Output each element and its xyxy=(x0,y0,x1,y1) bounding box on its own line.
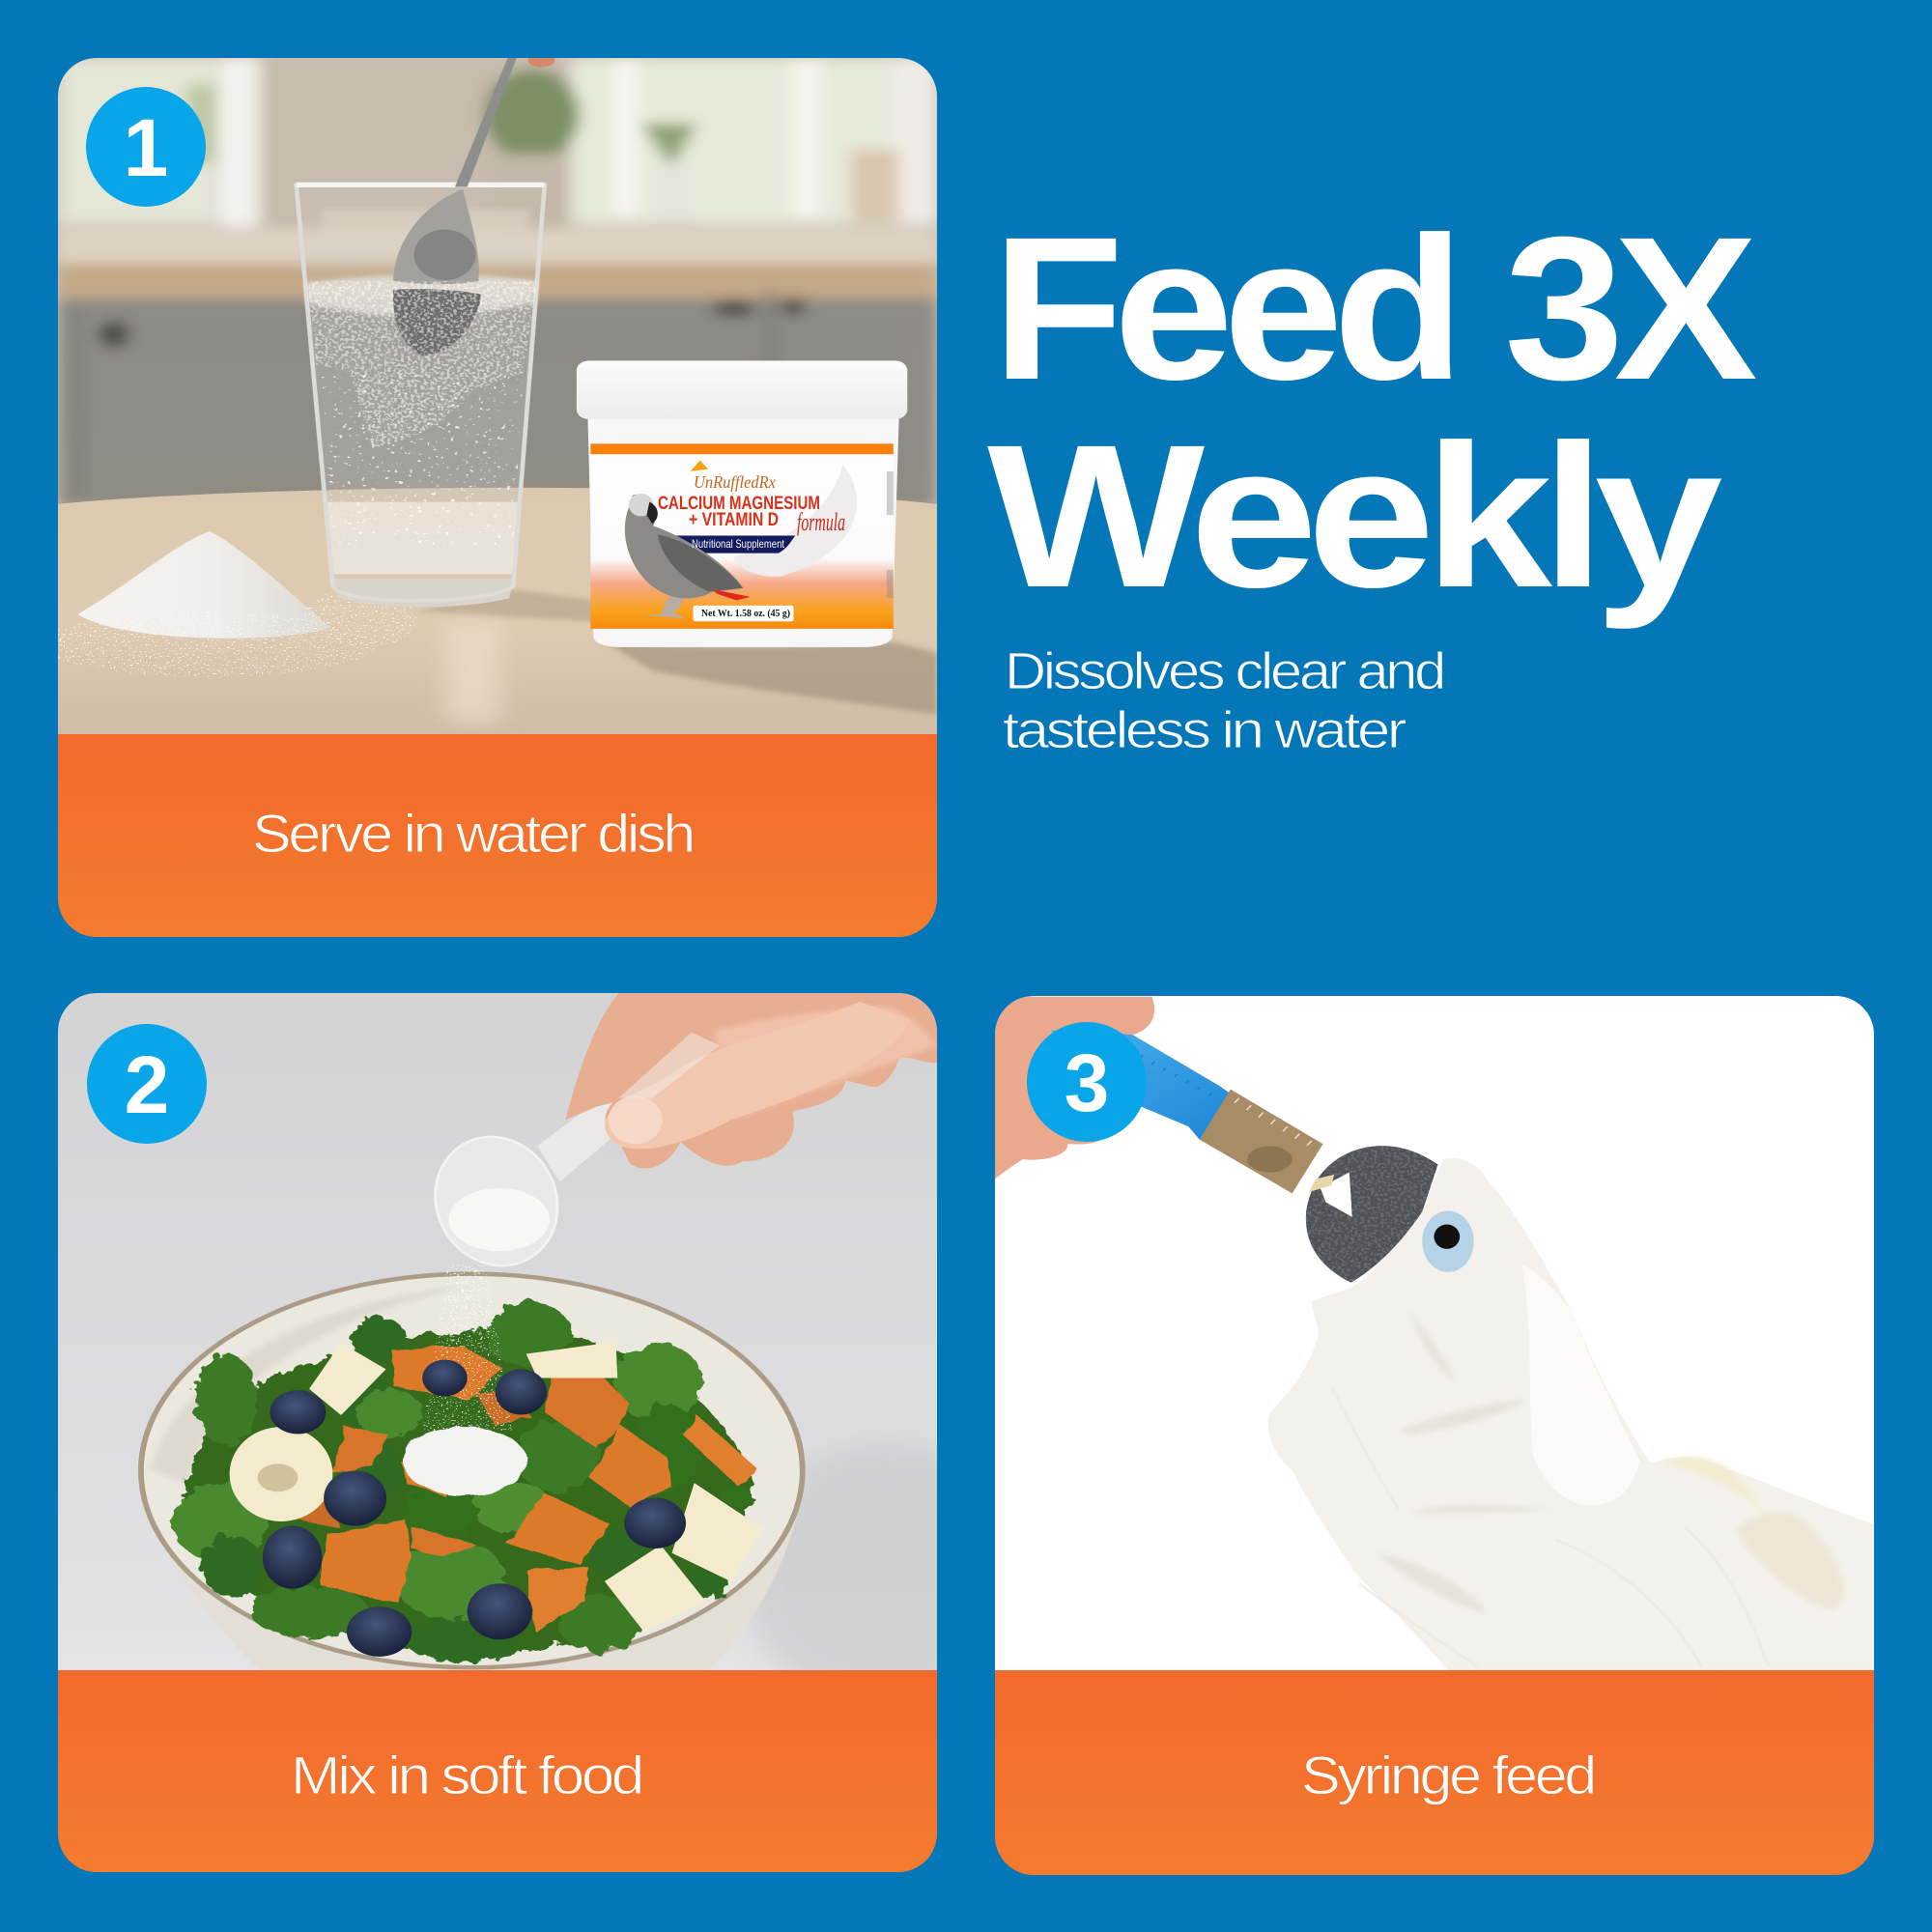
jar label text: Net Wt. 1.58 oz. (45 g) xyxy=(701,608,790,619)
glass xyxy=(297,185,545,607)
caption bar: step 3: Syringe feed xyxy=(1301,1745,1594,1805)
dissolving bubbles xyxy=(307,281,537,548)
badge: number 3 xyxy=(1027,1022,1147,1142)
panel: step 2 mix in soft food xyxy=(58,993,1034,1872)
measuring scoop xyxy=(425,1032,720,1272)
kale leaves xyxy=(173,1301,751,1662)
title xyxy=(987,194,1756,630)
badge: number 3: 3 xyxy=(1065,1037,1109,1128)
eye xyxy=(1422,1210,1474,1272)
bowl xyxy=(139,1274,805,1675)
jar label text: + VITAMIN D xyxy=(689,510,779,530)
caption bar: step 3 xyxy=(995,1670,1874,1875)
powder pile xyxy=(42,531,416,677)
spoon xyxy=(393,53,554,355)
badge: number 1: 1 xyxy=(124,102,168,193)
subtitle text xyxy=(1003,642,1443,759)
powder on food xyxy=(402,1264,527,1495)
subtitle text: tasteless in water xyxy=(1003,701,1406,759)
title: Feed 3X xyxy=(992,194,1756,422)
beak xyxy=(1306,1146,1438,1283)
badge: number 2 xyxy=(87,1024,207,1144)
hand xyxy=(995,997,1154,1179)
hand holding scoop xyxy=(565,993,937,1168)
jar label text: CALCIUM MAGNESIUM xyxy=(658,494,820,514)
subtitle text: Dissolves clear and xyxy=(1005,642,1443,700)
jar label text: Nutritional Supplement xyxy=(692,537,785,551)
panel: step 1 serve in water dish xyxy=(42,53,937,937)
banana pieces xyxy=(230,1342,763,1632)
parrot on label xyxy=(625,494,751,618)
caption bar: step 1 xyxy=(58,734,937,937)
photo: powder sprinkled on bowl of food xyxy=(58,993,1034,1706)
caption bar: step 2 xyxy=(58,1670,937,1872)
panel: step 3 syringe feed xyxy=(995,993,1874,1875)
photo: cockatoo fed by syringe xyxy=(995,993,1874,1675)
jar label text xyxy=(658,472,845,619)
badge: number 1 xyxy=(86,87,206,207)
photo: glass of water with jar on table xyxy=(42,53,937,740)
caption bar: step 2: Mix in soft food xyxy=(291,1745,641,1805)
jar of supplement xyxy=(577,360,907,647)
caption bar: step 1: Serve in water dish xyxy=(252,803,693,864)
cockatoo body xyxy=(1268,1158,1874,1675)
jar label text: UnRuffledRx xyxy=(694,472,776,492)
table top xyxy=(58,488,937,740)
syringe xyxy=(1051,1030,1323,1193)
title: Weekly xyxy=(987,402,1722,630)
sweet potato chunks xyxy=(288,1346,756,1632)
food base xyxy=(179,1329,753,1658)
jar label text: formula xyxy=(797,508,845,536)
badge: number 2: 2 xyxy=(125,1039,169,1130)
blueberries xyxy=(263,1359,686,1657)
